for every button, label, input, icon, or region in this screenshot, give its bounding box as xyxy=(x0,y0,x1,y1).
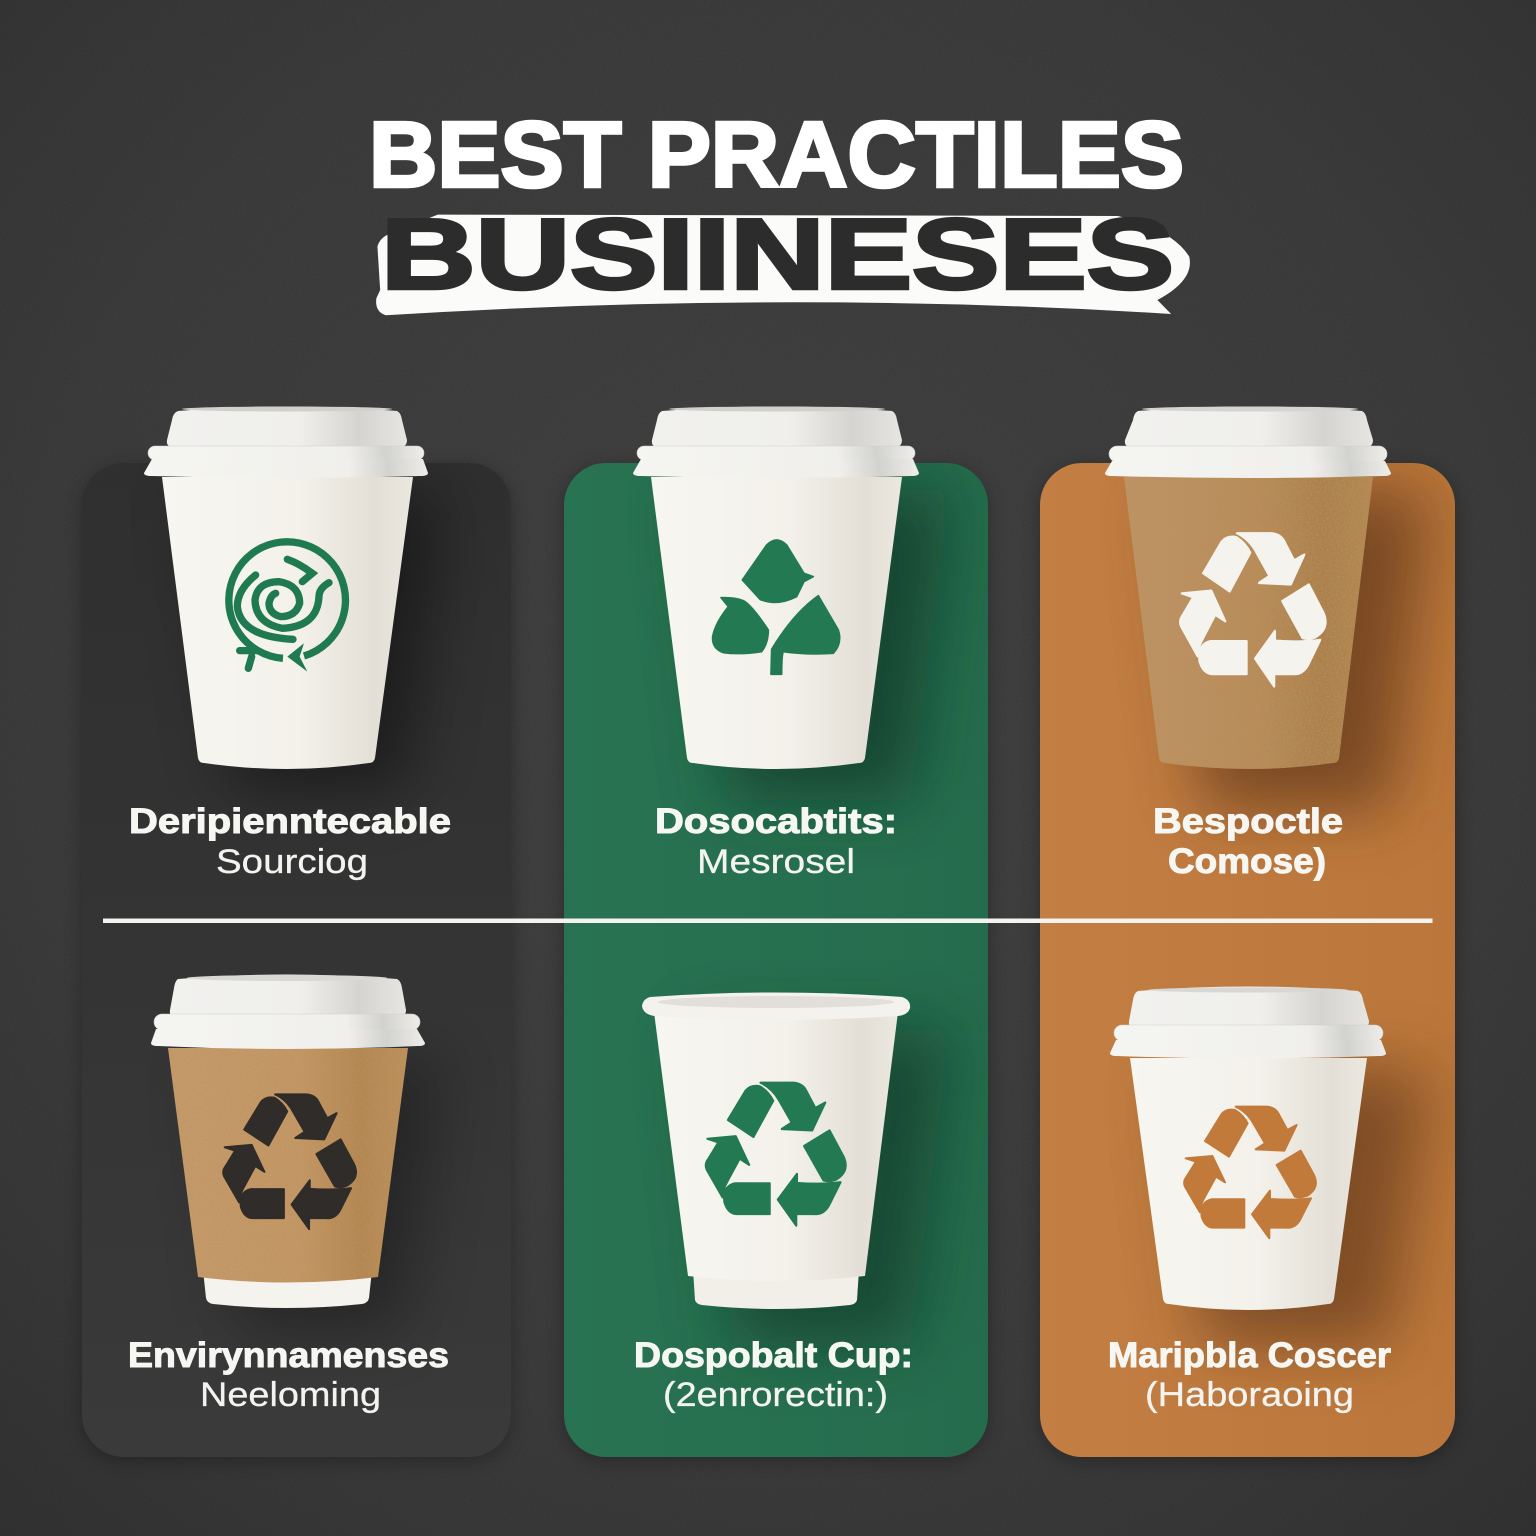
icon: orange recycle symbol xyxy=(1184,1107,1316,1238)
label: deripienntecable sourciog xyxy=(129,802,451,881)
title xyxy=(369,102,1190,315)
panel: green column xyxy=(564,406,988,1457)
icon: three leaves xyxy=(713,540,840,674)
label: maripbla coscer: Maripbla Coscer xyxy=(1108,1336,1391,1375)
label: deripienntecable sourciog: Sourciog xyxy=(216,843,368,881)
icon: swirl with arrows xyxy=(229,542,345,672)
title line: busiineses: BUSIINESES xyxy=(381,198,1174,310)
label: envirynnamenses neeloming: Neeloming xyxy=(200,1376,381,1414)
panel: dark column xyxy=(82,406,511,1457)
label: dospobalt cup xyxy=(634,1336,913,1414)
cup: white cup with swirl logo xyxy=(144,406,428,769)
label: deripienntecable sourciog: Deripienntecable xyxy=(129,802,451,841)
label: dosocabtits mesrosel: Dosocabtits: xyxy=(655,802,897,841)
label: envirynnamenses neeloming: Envirynnamenses xyxy=(128,1336,449,1375)
label: dosocabtits mesrosel xyxy=(655,802,897,881)
label: dosocabtits mesrosel: Mesrosel xyxy=(697,843,855,881)
panel: orange column xyxy=(1040,406,1455,1457)
label: bespoctle comose: Comose) xyxy=(1168,842,1326,881)
title banner: white brush stroke xyxy=(376,215,1190,315)
label: bespoctle comose xyxy=(1153,802,1343,881)
label: bespoctle comose: Bespoctle xyxy=(1153,802,1343,841)
title line: best practiles: BEST PRACTILES xyxy=(369,102,1184,206)
label: dospobalt cup: Dospobalt Cup: xyxy=(634,1336,913,1375)
icon: white recycle symbol xyxy=(1180,533,1326,686)
cup: kraft sleeve cup with dark recycle icon xyxy=(151,974,425,1308)
cup: white cup with orange recycle icon xyxy=(1110,986,1386,1310)
cup: kraft cup with white recycle icon xyxy=(1105,406,1391,769)
icon: green recycle symbol xyxy=(706,1083,846,1226)
cup: white cup with leaf trefoil xyxy=(633,406,919,769)
label: dospobalt cup: (2enrorectin:) xyxy=(663,1376,888,1414)
cup: open double-wall cup with green recycle icon xyxy=(642,992,910,1309)
label: maripbla coscer xyxy=(1108,1336,1391,1414)
icon: dark recycle symbol xyxy=(223,1094,356,1229)
label: envirynnamenses neeloming xyxy=(128,1336,449,1414)
label: maripbla coscer: (Haboraoing xyxy=(1145,1376,1354,1414)
